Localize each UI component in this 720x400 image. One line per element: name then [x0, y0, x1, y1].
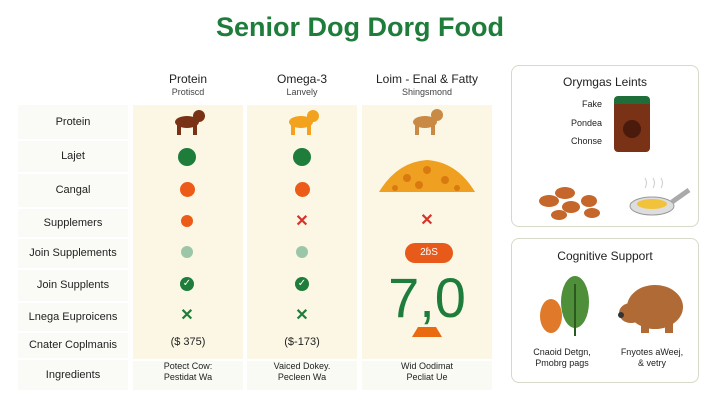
- panel: cognitive support: [511, 238, 699, 383]
- panel: cognitive support: & vetry: [638, 358, 666, 368]
- icon: nuts: [539, 187, 600, 220]
- row labels: Join Supplents: [37, 279, 109, 291]
- row labels: Protein: [56, 116, 90, 128]
- markers col1 & col2: ✓: [298, 278, 306, 289]
- panel: cognitive support: Cognitive Support: [557, 249, 653, 263]
- row labels: Cnater Coplmanis: [29, 339, 117, 351]
- column headers: Loim - Enal & Fatty: [376, 72, 478, 86]
- column headers: [169, 72, 478, 97]
- table: comparison: Wid Oodimat: [401, 361, 453, 371]
- markers col1 & col2: ✕: [295, 213, 309, 230]
- ingredients text: Potect Cow:: [164, 361, 212, 371]
- column headers: Shingsmond: [402, 87, 452, 97]
- icon: food bag: [614, 96, 650, 152]
- prices: ($ 375): [171, 336, 205, 348]
- panel: omegas: Pondea: [571, 118, 602, 128]
- ingredients text: [164, 361, 212, 382]
- row labels: Cangal: [56, 184, 90, 196]
- panel: omegas: Fake: [582, 99, 602, 109]
- table: comparison: ✕: [420, 212, 434, 229]
- icon: bowl: [412, 327, 442, 337]
- panel: cognitive support: Cnaoid Detgn,: [533, 347, 591, 357]
- icon: animal: [618, 285, 683, 333]
- table: comparison: [18, 72, 492, 390]
- icon: leaf & carrot: [540, 276, 589, 336]
- row labels: Lajet: [61, 150, 85, 162]
- row labels: Supplemers: [44, 217, 102, 229]
- column headers: Lanvely: [286, 87, 318, 97]
- icon: dogs: [175, 109, 443, 135]
- table: comparison: Pecleen Wa: [278, 372, 326, 382]
- markers col1 & col2: [178, 148, 311, 324]
- row labels: Join Supplements: [29, 247, 117, 259]
- cells backgrounds: [133, 105, 492, 390]
- panel: omegas: Chonse: [571, 136, 602, 146]
- panel: cognitive support: Pmobrg pags: [535, 358, 589, 368]
- ingredients text: Pestidat Wa: [164, 372, 212, 382]
- table: comparison: ($-173): [284, 336, 320, 348]
- table: comparison: Vaiced Dokey.: [274, 361, 330, 371]
- markers col1 & col2: ✕: [180, 307, 194, 324]
- markers col1 & col2: ✕: [295, 307, 309, 324]
- icon: kibble pile: [379, 160, 475, 192]
- big number 70: 7,0: [388, 266, 466, 329]
- badge: [405, 243, 453, 263]
- markers col1 & col2: ✓: [183, 278, 191, 289]
- icon: pan: [630, 178, 690, 216]
- title: Senior Dog Dorg Food: [216, 12, 504, 42]
- badge: 2ɓS: [420, 247, 438, 258]
- panel: omegas: Orymgas Leints: [563, 75, 647, 89]
- row labels: Lnega Euproicens: [29, 311, 117, 323]
- panel: omegas: [511, 65, 699, 227]
- row labels: [18, 105, 128, 390]
- column headers: Omega-3: [277, 72, 327, 86]
- table: comparison: Pecliat Ue: [406, 372, 448, 382]
- column headers: Protein: [169, 72, 207, 86]
- row labels: Ingredients: [46, 369, 100, 381]
- panel: cognitive support: Fnyotes aWeej,: [621, 347, 683, 357]
- column headers: Protiscd: [172, 87, 204, 97]
